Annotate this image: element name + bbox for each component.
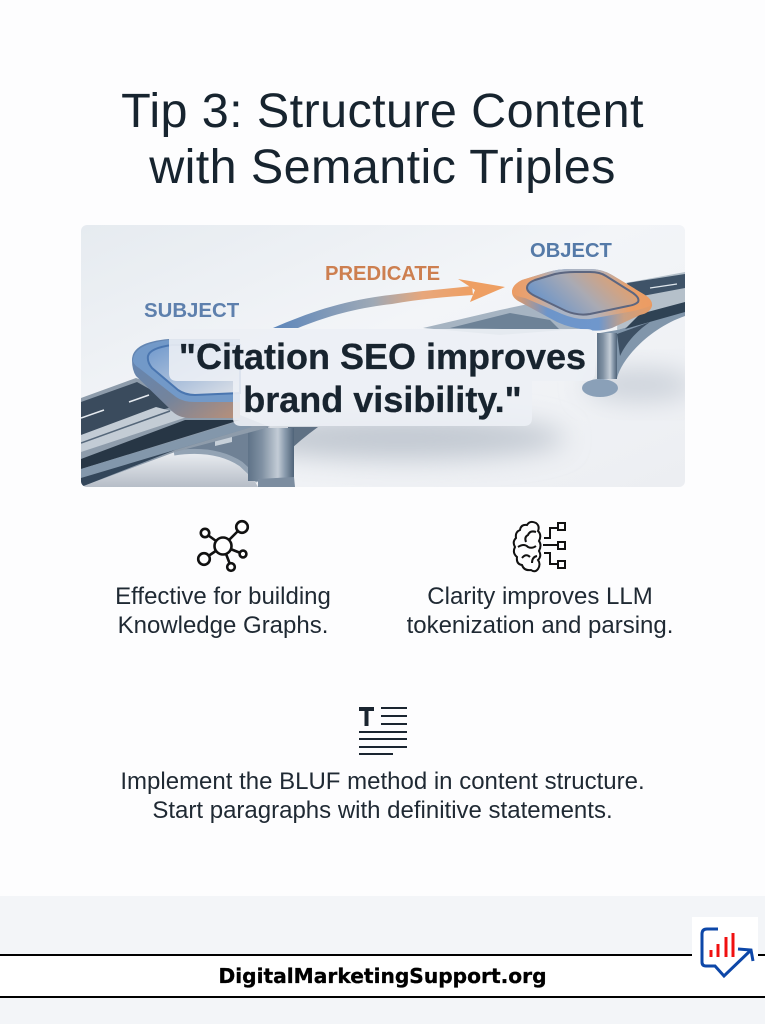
text: LLM tokenization: tokenization and parsing.	[407, 612, 673, 639]
title: with Semantic Triples	[149, 140, 616, 194]
text: LLM tokenization: Clarity improves LLM	[427, 583, 653, 610]
quote text line 2: brand visibility."	[243, 379, 522, 420]
left pier and arch	[170, 427, 318, 487]
right platform	[512, 269, 652, 331]
right ground shadow	[585, 369, 695, 401]
text: LLM tokenization	[407, 583, 673, 639]
text: knowledge graphs: Effective for building	[115, 583, 331, 610]
footer band	[0, 896, 765, 1024]
icon: network nodes	[196, 520, 250, 572]
left platform	[132, 339, 240, 418]
shadow under left arch	[81, 451, 258, 487]
footer url strip	[0, 954, 765, 998]
title: Tip 3: Structure Content	[121, 84, 644, 138]
text: BLUF method: Implement the BLUF method in content structure.	[120, 768, 645, 795]
text: knowledge graphs	[115, 583, 331, 639]
logo	[692, 917, 758, 978]
label: object: OBJECT	[530, 240, 613, 262]
title	[121, 84, 644, 194]
icon: brain with circuit nodes	[512, 520, 566, 572]
text: BLUF method: Start paragraphs with definitive statements.	[152, 797, 613, 824]
footer url strip: DigitalMarketingSupport.org	[218, 964, 547, 988]
quote backdrop	[169, 329, 595, 426]
ground shadow	[235, 416, 565, 460]
label: subject: SUBJECT	[144, 300, 240, 322]
panel: semantic triple bridge illustration	[81, 225, 685, 487]
text: knowledge graphs: Knowledge Graphs.	[118, 612, 328, 639]
label: predicate: PREDICATE	[325, 263, 440, 285]
right arch and pier	[582, 310, 685, 397]
icon: text block with T	[359, 707, 407, 755]
quote text: "Citation SEO improves	[179, 336, 586, 377]
text: BLUF method	[120, 768, 645, 824]
middle road	[423, 304, 580, 330]
left road	[81, 378, 270, 487]
arrow: predicate arc	[273, 279, 505, 328]
right road	[617, 272, 685, 330]
